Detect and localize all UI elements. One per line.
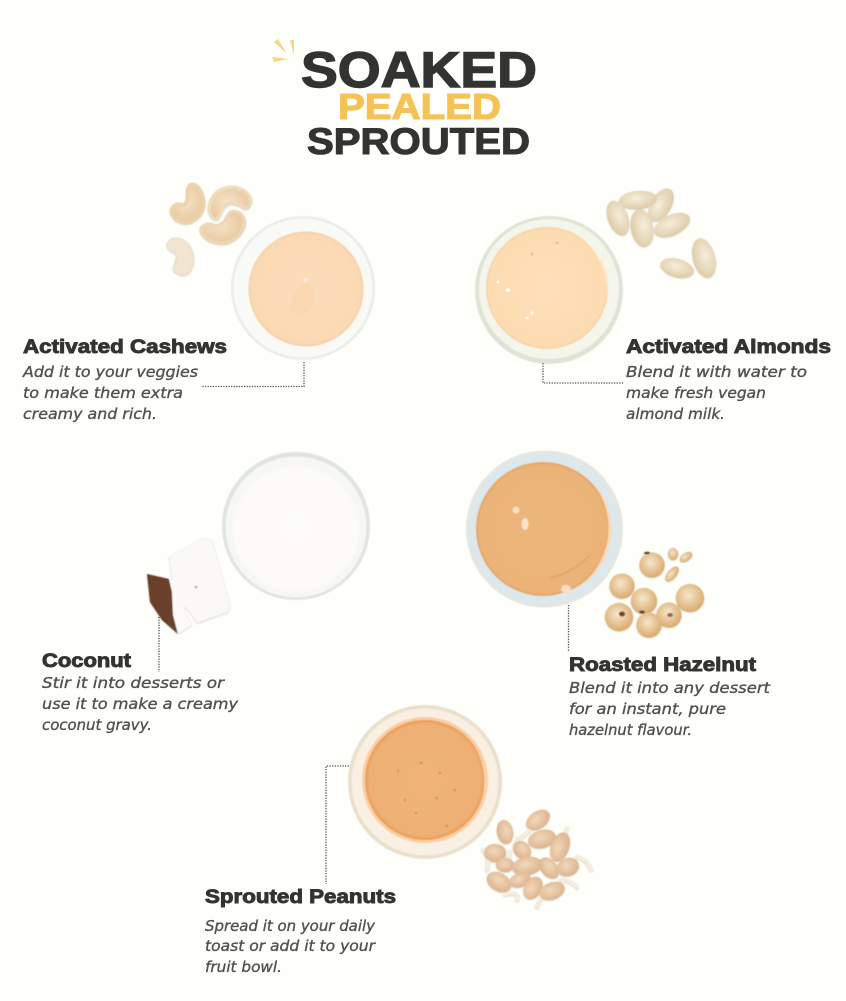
description: Blend it with water to	[626, 363, 807, 381]
jar: almond butter	[475, 216, 623, 364]
description: creamy and rich.	[23, 405, 157, 423]
icon: sprouted peanuts	[483, 806, 591, 907]
connector	[326, 766, 349, 884]
description: Stir it into desserts or	[42, 674, 226, 692]
panel: roasted hazelnut	[466, 450, 771, 739]
connector	[201, 362, 304, 386]
jar: coconut butter	[222, 452, 370, 600]
description: make fresh vegan	[626, 384, 766, 402]
jar: hazelnut butter	[466, 450, 623, 608]
description: Add it to your veggies	[22, 363, 198, 381]
description: toast or add it to your	[205, 937, 377, 955]
connector	[543, 363, 624, 383]
description	[626, 363, 807, 423]
panel: coconut	[42, 452, 370, 734]
description: almond milk.	[626, 405, 725, 423]
description: coconut gravy.	[42, 716, 152, 734]
heading: Coconut	[42, 651, 132, 672]
description: Blend it into any dessert	[569, 679, 771, 697]
description	[569, 679, 771, 739]
panel: activated almonds	[475, 184, 831, 423]
icon: spark rays	[272, 39, 294, 62]
description	[22, 363, 198, 423]
jar: cashew butter	[231, 216, 375, 360]
heading: Sprouted Peanuts	[205, 887, 396, 908]
description: Spread it on your daily	[205, 917, 376, 935]
jar: peanut butter	[348, 705, 502, 859]
description: fruit bowl.	[205, 958, 282, 976]
icon: hazelnuts	[605, 548, 704, 638]
heading: Activated Almonds	[626, 337, 831, 358]
description	[42, 674, 239, 734]
title line: sprouted: SPROUTED	[307, 121, 530, 162]
icon: cashews	[168, 184, 251, 274]
heading: Roasted Hazelnut	[569, 655, 757, 676]
description: hazelnut flavour.	[569, 721, 692, 739]
description: to make them extra	[23, 384, 183, 402]
description: for an instant, pure	[569, 700, 726, 718]
description	[205, 917, 377, 976]
connector	[568, 605, 570, 652]
panel: sprouted peanuts	[205, 705, 591, 976]
title	[272, 39, 537, 162]
title line: soaked: SOAKED	[301, 42, 537, 98]
title line: pealed: PEALED	[338, 86, 501, 127]
connector	[158, 617, 160, 672]
icon: coconut pieces	[147, 537, 230, 634]
icon: almonds	[602, 184, 720, 281]
heading: Activated Cashews	[23, 337, 227, 358]
description: use it to make a creamy	[42, 695, 239, 713]
panel: activated cashews	[22, 184, 375, 423]
